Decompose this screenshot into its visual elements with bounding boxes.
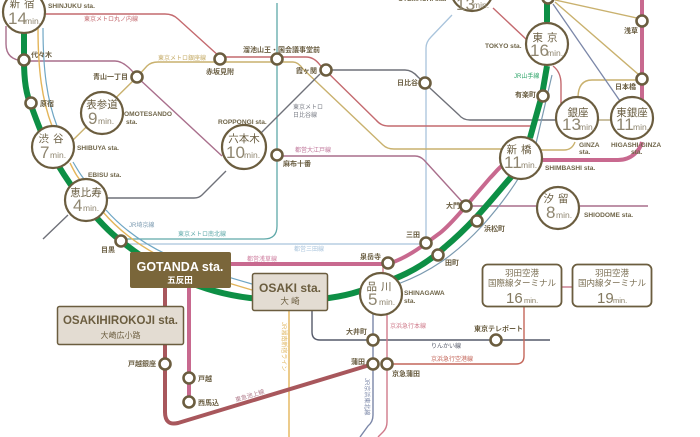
panel: Gotanda: [130, 252, 231, 288]
station: Kamata: [351, 357, 378, 370]
station: Azabu-juban: [272, 150, 311, 168]
station: Tokyo Teleport: [474, 324, 523, 346]
panel: Haneda International Terminal: min.: [524, 296, 538, 305]
station: Aoyama-itchome: 青山一丁目: [93, 72, 128, 81]
station: Shinagawa: SHINAGAWA: [404, 290, 445, 297]
station: Shinjuku: min.: [25, 16, 41, 26]
panel: Haneda International Terminal: 16: [506, 290, 523, 307]
station: Tamachi: [432, 250, 459, 267]
station: Hamamatsucho: [472, 216, 505, 233]
station: Shiodome: SHIODOME sta.: [584, 212, 633, 219]
panel: Haneda Domestic Terminal: 羽田空港: [595, 268, 629, 278]
station: Ebisu: 4: [73, 196, 82, 215]
line: Shonan-Shinjuku: [38, 28, 289, 437]
station: Mita: [406, 231, 432, 248]
panel: Osakihirokoji: 大崎広小路: [100, 330, 140, 340]
station: Shimbashi: 11: [504, 153, 522, 172]
station: Roppongi: ROPPONGI sta.: [218, 119, 267, 126]
line labels: 京浜急行空港線: [431, 355, 473, 363]
station: Meguro: [101, 236, 126, 254]
line labels: JR山手線: [514, 72, 539, 80]
station: Higashi-Ginza: sta.: [631, 149, 643, 156]
station: Keikyu Kamata: 京急蒲田: [392, 369, 420, 378]
station: Ebisu: [65, 172, 122, 221]
line: Toei Oedo: [6, 26, 466, 206]
line labels: 日比谷線: [293, 111, 317, 119]
station: Tokyo: 東京: [532, 31, 562, 44]
station: Ebisu: 恵比寿: [70, 186, 102, 199]
station: Tamachi: 田町: [445, 259, 459, 267]
station: Akasaka-mitsuke: [206, 54, 234, 76]
station: Shimbashi: min.: [521, 160, 537, 170]
line labels: 都営三田線: [294, 245, 324, 253]
station: Shimbashi: 新橋: [506, 143, 536, 156]
station: Shiodome: min.: [556, 210, 572, 220]
station: Tokyo: TOKYO sta.: [485, 43, 522, 50]
station: Hibiya: 日比谷: [397, 78, 418, 87]
line labels: JR湘南新宿ライン: [280, 322, 288, 371]
station: Kasumigaseki: [296, 64, 332, 76]
panel: Osaki: OSAKI sta.: [259, 281, 321, 295]
station: Asakusa: 浅草: [624, 26, 638, 35]
line labels: [84, 15, 539, 415]
station: Ginza: sta.: [579, 149, 591, 156]
line labels: 東急池上線: [234, 387, 265, 404]
panel: Haneda Domestic Terminal: min.: [613, 296, 627, 305]
station: Higashi-Ginza: 11: [616, 115, 634, 134]
station: Oimachi: [346, 327, 378, 346]
station: Kamata: 蒲田: [351, 357, 365, 366]
station: Roppongi: [218, 119, 267, 169]
line: Keihin-Tohoku: [398, 75, 552, 284]
line labels: JR京浜東北線: [363, 378, 371, 415]
station: Yurakucho: [515, 90, 548, 102]
station: Nihombashi: 日本橋: [615, 82, 636, 91]
station: Shinagawa: [360, 273, 445, 315]
station: Yoyogi: [18, 50, 52, 66]
station: Roppongi: 10: [226, 143, 245, 162]
station: Shinjuku: 14: [8, 9, 27, 28]
station: Roppongi: 六本木: [228, 132, 260, 145]
panel: Osakihirokoji: [58, 306, 184, 344]
station: Yurakucho: 有楽町: [515, 90, 536, 99]
station: Mita: 三田: [406, 231, 420, 239]
station: Tameike-sanno: [243, 45, 320, 64]
panel: Haneda International Terminal: [482, 264, 562, 307]
station: Shinagawa: min.: [379, 297, 395, 307]
station: Ebisu: min.: [83, 203, 99, 213]
line labels: 都営浅草線: [247, 255, 277, 263]
station: Higashi-Ginza: [611, 97, 661, 156]
station: Higashi-Ginza: 東銀座: [616, 106, 648, 119]
panel: Osakihirokoji: OSAKIHIROKOJI sta.: [63, 315, 178, 327]
line: Shiodome Oedo branch: [466, 205, 648, 207]
station: Nihombashi: [615, 74, 648, 91]
line: diagonal to Higashi-Ginza: [553, 4, 620, 101]
station: Tokyo: [485, 23, 568, 65]
station: Nishi-magome: 西馬込: [198, 399, 219, 407]
line labels: 東京メトロ銀座線: [158, 54, 206, 62]
station: Shinjuku: [3, 0, 95, 33]
panel: Osaki: [252, 274, 328, 310]
station: Shiodome: 8: [546, 203, 555, 222]
station: Harajuku: 原宿: [40, 99, 54, 108]
station: Otemachi partial: [542, 0, 554, 4]
station: Shibuya: SHIBUYA sta.: [77, 145, 119, 152]
station: Meguro: 目黒: [101, 246, 115, 254]
station: Omotesando: OMOTESANDO: [124, 111, 172, 118]
panel: Haneda Domestic Terminal: [572, 264, 652, 307]
station: Shiodome: 汐留: [544, 192, 572, 205]
station: Roppongi: min.: [244, 150, 260, 160]
station: Shinjuku: SHINJUKU sta.: [48, 3, 95, 10]
station: Oimachi: 大井町: [346, 327, 367, 336]
station: Omotesando: 9: [88, 109, 97, 128]
station: Shibuya: 渋谷: [38, 132, 68, 145]
panel: Osaki: 大 崎: [280, 296, 300, 306]
station: Shimbashi: SHIMBASHI sta.: [545, 165, 595, 172]
station: Sengakuji: 泉岳寺: [360, 252, 381, 261]
line: Keikyu airport: [387, 305, 524, 364]
station: Ginza: 銀座: [568, 106, 588, 119]
station: Shibuya: [32, 126, 119, 168]
station: Shinagawa: 5: [368, 290, 377, 309]
station: Shimbashi: [500, 137, 595, 179]
station: Omotesando: 表参道: [86, 98, 118, 111]
station: Higashi-Ginza: min.: [633, 122, 649, 132]
station: Higashi-Ginza: HIGASHI-GINZA: [611, 142, 661, 149]
line: Shinagawa to Sengakuji link: [382, 264, 384, 276]
line labels: 都営大江戸線: [295, 146, 331, 154]
station: Ginza: min.: [579, 122, 595, 132]
line: Toei Mita: [125, 15, 452, 244]
line labels: 東京メトロ丸ノ内線: [84, 15, 138, 23]
station: Omotesando: [81, 92, 172, 134]
panel: Haneda Domestic Terminal: 19: [597, 290, 614, 307]
panel: Haneda International Terminal: 羽田空港: [505, 268, 539, 278]
station: Omotesando: min.: [98, 116, 114, 126]
station: Daimon: 大門: [446, 201, 460, 210]
station: Shiodome: [537, 187, 633, 229]
station: Ginza: [556, 97, 600, 156]
station: Azabu-juban: 麻布十番: [283, 159, 311, 168]
panel: Haneda International Terminal: 国際線ターミナル: [488, 278, 556, 288]
station: Aoyama-itchome: [93, 72, 142, 82]
station: Keikyu Kamata: [382, 358, 420, 378]
line: Hibiya: [43, 70, 560, 239]
line: Keikyu main: [378, 314, 387, 437]
station: Togoshi: [184, 372, 212, 384]
line: Toei Asakusa east: [231, 0, 642, 264]
line labels: 京浜急行本線: [390, 322, 426, 330]
station: Nishi-magome: [184, 396, 219, 408]
line: Ginza: [72, 0, 638, 150]
station: Harajuku: [26, 98, 54, 108]
station: Ginza: 13: [562, 115, 581, 134]
line: Saikyo: [43, 28, 252, 284]
panel: Haneda Domestic Terminal: 国内線ターミナル: [578, 278, 646, 288]
line: Rinkai: [312, 311, 550, 340]
station: Togoshi-ginza: [128, 358, 170, 370]
line: Tokyu Ikegami: [165, 288, 373, 424]
line labels: 東京メトロ: [293, 103, 323, 111]
station: Sengakuji: [360, 252, 394, 268]
station: Asakusa: [624, 16, 648, 35]
line: Keihin-Tohoku south: [360, 314, 373, 437]
station: Hibiya: [397, 78, 430, 88]
station: Tameike-sanno: 溜池山王・国会議事堂前: [243, 45, 320, 54]
station: Hamamatsucho: 浜松町: [484, 224, 505, 233]
station: Shibuya: 7: [40, 143, 49, 162]
panel: Gotanda: 五反田: [167, 275, 193, 285]
station: Omotesando: sta.: [126, 119, 138, 126]
line: Tokyo Metro Namboku: [125, 3, 277, 239]
line labels: JR埼京線: [129, 221, 154, 229]
station: Otemachi: min.: [473, 0, 489, 10]
station: Togoshi-ginza: 戸越銀座: [128, 359, 156, 368]
station: Ebisu: EBISU sta.: [88, 172, 122, 179]
line labels: りんかい線: [431, 342, 461, 350]
line: Haneda terminal link: [562, 286, 572, 288]
line: Asakusa south branch: [187, 288, 191, 402]
line labels: 東京メトロ南北線: [178, 230, 226, 238]
station: Tokyo Teleport: 東京テレポート: [474, 324, 523, 333]
station: Shinagawa: sta.: [404, 298, 416, 305]
station: Otemachi: [398, 0, 493, 14]
line: Ginza to Higashi-Ginza link: [595, 119, 615, 121]
station: Kasumigaseki: 霞ヶ関: [296, 67, 317, 75]
panel: Gotanda: GOTANDA sta.: [137, 260, 223, 274]
station: Yoyogi: 代々木: [31, 50, 52, 59]
station: Tokyo: min.: [547, 48, 563, 58]
line: Marunouchi: [40, 8, 561, 126]
station: Akasaka-mitsuke: 赤坂見附: [206, 67, 234, 76]
station: Tokyo: 16: [530, 41, 549, 60]
station: Shinagawa: 品川: [366, 281, 396, 293]
station: Ginza: GINZA: [579, 142, 600, 149]
station: Togoshi: 戸越: [198, 374, 212, 383]
station: Daimon: [446, 200, 472, 212]
line: Yamanote: [24, 0, 547, 300]
station: Shibuya: min.: [50, 150, 66, 160]
